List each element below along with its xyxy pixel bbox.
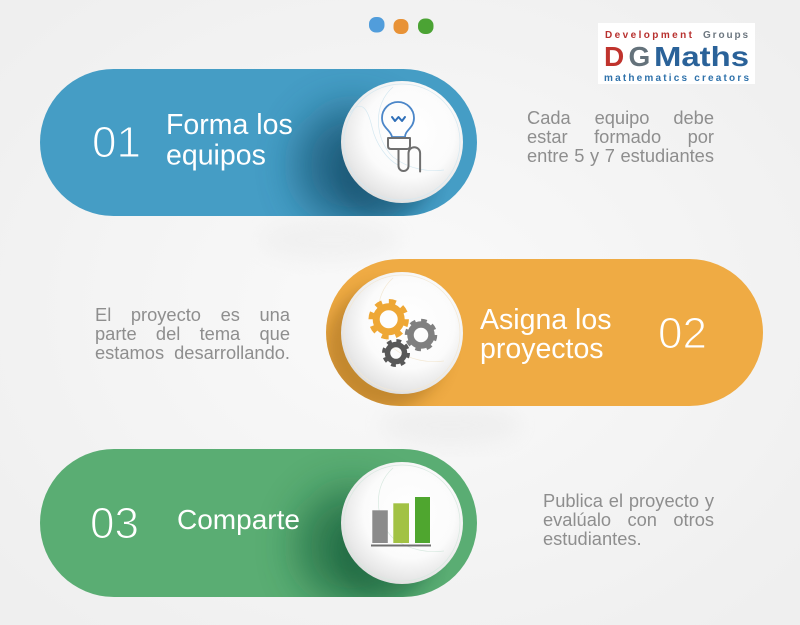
icon: orange gear: [371, 301, 407, 337]
logo: DGMaths: Groups: [703, 30, 748, 41]
logo: DGMaths: Development: [605, 30, 693, 41]
logo: DGMaths: [598, 23, 755, 84]
icon: bar chart: [371, 497, 431, 546]
sphere with gears icon: [341, 272, 463, 394]
logo: DGMaths: G: [628, 41, 650, 72]
icon: light bulb: [382, 102, 420, 172]
sphere with bar chart icon: [341, 462, 463, 584]
logo: DGMaths: Maths: [654, 41, 749, 72]
text block: team size: estar formado por: [527, 126, 714, 147]
panel: 02 Asigna los proyectos: [325, 259, 763, 410]
text block: publish and evaluate: evalúalo con otros: [543, 509, 714, 530]
number: 02: 02: [658, 309, 707, 358]
text block: project description: [95, 304, 290, 363]
heading: Forma los equipos: Forma los: [166, 109, 293, 141]
text block: team size: Cada equipo debe: [527, 107, 714, 128]
panel: 03 Comparte: [40, 449, 477, 604]
pill: green: [40, 449, 477, 597]
heading: Asigna los proyectos: proyectos: [480, 333, 604, 365]
text block: publish and evaluate: [543, 490, 714, 549]
number: 01: 01: [92, 118, 141, 167]
sphere with light bulb icon: [341, 81, 463, 203]
pill: orange: [326, 259, 763, 406]
heading: Asigna los proyectos: Asigna los: [480, 304, 612, 336]
text block: project description: El proyecto es una: [95, 304, 290, 325]
text block: project description: parte del tema que: [95, 323, 290, 344]
logo: DGMaths: D: [604, 41, 624, 72]
panel: 01 Forma los equipos: [40, 69, 477, 223]
pill: blue: [40, 69, 477, 216]
logo: DGMaths: mathematics creators: [604, 73, 749, 84]
text block: project description: estamos desarrollando.: [95, 342, 290, 363]
text block: team size: entre 5 y 7 estudiantes: [527, 145, 714, 166]
icon: dark gear: [384, 340, 408, 366]
decorative dots: [369, 17, 434, 34]
number: 03: 03: [90, 499, 139, 548]
text block: publish and evaluate: Publica el proyecto y: [543, 490, 714, 511]
text block: team size: [527, 107, 714, 166]
icon: gray gear: [406, 320, 436, 350]
heading: Comparte: Comparte: [177, 504, 300, 535]
heading: Forma los equipos: equipos: [166, 140, 266, 172]
text block: publish and evaluate: estudiantes.: [543, 528, 642, 549]
